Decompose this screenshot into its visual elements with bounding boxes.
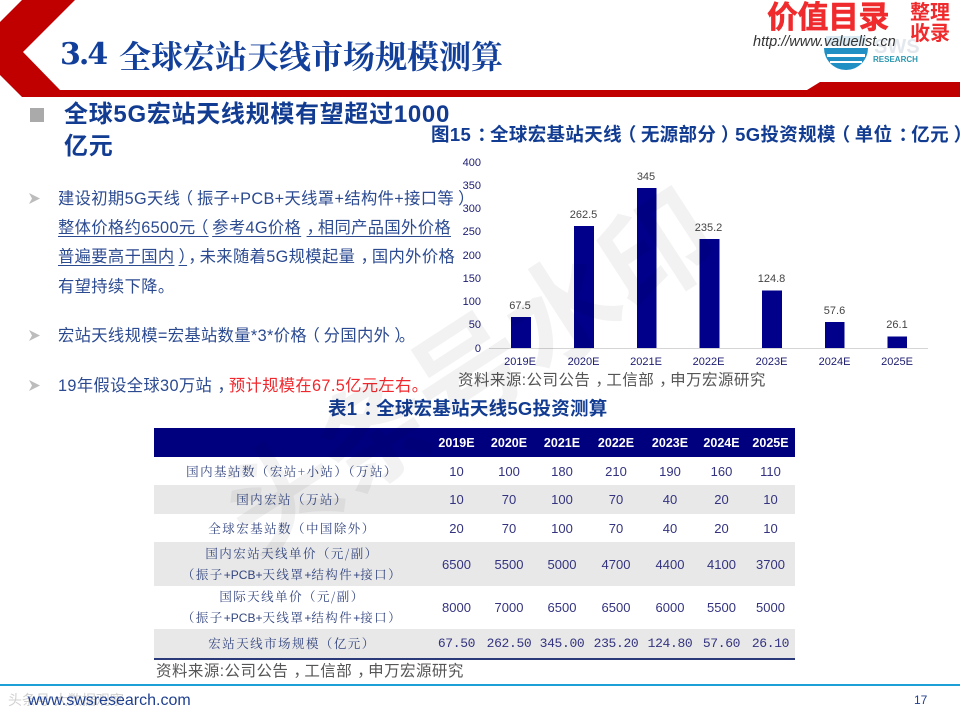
data table: 2022E	[598, 436, 634, 450]
bar chart: 50	[469, 319, 481, 331]
data table: 100	[551, 520, 573, 536]
bar chart: 300	[463, 203, 481, 215]
bar chart: 0	[475, 343, 481, 355]
data table: 国际天线单价（元/副）	[219, 587, 365, 605]
data table: 10	[763, 520, 778, 536]
data table: 6500	[442, 556, 471, 572]
footer URL: www.swsresearch.com	[28, 692, 191, 709]
data table: 4100	[707, 556, 736, 572]
title number: 3.4	[60, 37, 106, 72]
data table: 262.50	[487, 636, 531, 651]
data table: 210	[605, 464, 627, 478]
bar chart: 350	[463, 180, 481, 192]
data table: 8000	[442, 600, 471, 615]
bar chart: 250	[463, 226, 481, 238]
bar chart: 345	[637, 171, 655, 183]
data table: 3700	[756, 556, 785, 572]
bar chart: 26.1	[886, 319, 908, 331]
bar chart: 100	[463, 296, 481, 308]
data table: 70	[609, 492, 623, 507]
data table: 124.80	[648, 636, 692, 651]
data table: 2024E	[703, 436, 740, 450]
data table: 10	[449, 464, 464, 478]
data table: 2020E	[491, 436, 527, 450]
bar chart: 67.5	[509, 300, 531, 312]
table title: 表1 ：全球宏基站天线5G投资测算	[328, 398, 608, 419]
data table: 67.50	[438, 636, 475, 651]
bar chart: 400	[463, 157, 481, 169]
bar chart: 2024E	[819, 356, 850, 368]
data table: 10	[449, 492, 464, 507]
data table: 6500	[602, 600, 630, 615]
data table: 国内宏站天线单价（元/副）	[205, 544, 379, 562]
section heading: 亿元	[64, 133, 113, 160]
data table: 190	[659, 464, 681, 478]
bullet text 1 line 3: 普遍要高于国内），未来随着5G规模起量 ，国内外价格	[58, 248, 455, 266]
bar chart: 2023E	[756, 356, 787, 368]
SWS research text: RESEARCH	[873, 55, 918, 64]
data table: 5500	[707, 600, 736, 615]
bullet list	[29, 190, 475, 395]
URL: http://www.valuelist.cn	[753, 34, 896, 50]
header banner: red chevron and rule	[0, 0, 960, 97]
chart title: 图15 ：全球宏基站天线（无源部分）5G投资规模（单位 ：亿元）	[431, 124, 960, 145]
bullet icon 3	[29, 380, 40, 391]
data table: 7000	[495, 600, 523, 615]
bar chart: 2019E	[504, 356, 536, 368]
bullet text 1 line 4: 有望持续下降。	[58, 278, 174, 296]
data table: 2023E	[652, 436, 688, 450]
data table: 180	[551, 464, 573, 478]
footer rule	[0, 684, 960, 686]
data table: 70	[502, 520, 516, 536]
bar chart: 200	[463, 250, 481, 262]
data table: 6000	[656, 600, 684, 615]
bar chart: 2021E	[630, 356, 662, 368]
table source: 资料来源:公司公告 ，工信部 ，申万宏源研究	[156, 663, 464, 680]
section heading	[64, 101, 450, 160]
title	[60, 32, 503, 78]
bar chart: 2025E	[881, 356, 913, 368]
data table: 26.10	[752, 636, 789, 651]
bullet icon 2	[29, 330, 40, 341]
data table: 5000	[756, 600, 785, 615]
data table: 345.00	[540, 636, 584, 651]
data table: （振子+PCB+天线罩+结构件+接口）	[182, 564, 402, 582]
data table: 20	[449, 520, 464, 536]
bar chart	[462, 157, 928, 368]
bar chart: 150	[463, 273, 481, 285]
data table: 5000	[548, 556, 576, 572]
data table: 国内宏站（万站）	[236, 490, 348, 508]
data table: 235.20	[594, 636, 638, 651]
data table: 160	[711, 464, 732, 478]
bar chart: 235.2	[695, 222, 722, 234]
data table: 40	[663, 492, 677, 507]
logo: SWS research and value list stamp	[753, 0, 950, 70]
data table: 20	[714, 520, 729, 536]
data table: 宏站天线市场规模（亿元）	[208, 634, 376, 652]
data table: 5500	[495, 556, 523, 572]
data table: 10	[763, 492, 778, 507]
data table: 100	[551, 492, 573, 507]
bullet text 1: 建设初期5G天线（振子+PCB+天线罩+结构件+接口等）	[58, 190, 475, 208]
diagonal watermark: 头条号水印	[186, 146, 744, 586]
data table: 70	[609, 520, 623, 536]
data table: 40	[663, 520, 677, 536]
data table: 全球宏基站数（中国除外）	[208, 518, 376, 536]
bar chart: 2022E	[693, 356, 724, 368]
data table: 4700	[602, 556, 630, 572]
data table: 70	[502, 492, 516, 507]
data table	[154, 428, 795, 660]
bar chart: 124.8	[758, 273, 785, 285]
footer watermark: 头条号 大数据观察	[8, 692, 124, 708]
value list red wordmark: 价值目录	[767, 0, 889, 35]
data table: 110	[760, 464, 781, 478]
data table: 2025E	[752, 436, 789, 450]
data table: 6500	[548, 600, 576, 615]
SWS faint wordmark: SWS	[874, 36, 920, 58]
stamp: 整理收录: 整理收录	[910, 2, 950, 45]
chart source: 资料来源:公司公告 ，工信部 ，申万宏源研究	[458, 372, 766, 389]
bullet text 2: 宏站天线规模=宏基站数量*3*价格（分国内外）。	[58, 327, 415, 345]
data table: 国内基站数（宏站+小站）（万站）	[186, 462, 398, 480]
bullet icon 1	[29, 193, 40, 204]
data table: 2019E	[438, 436, 475, 450]
bullet text 1 line 2: 整体价格约6500元（参考4G价格 ，相同产品国外价格	[58, 219, 451, 237]
page number: 17	[914, 693, 927, 707]
title text: 全球宏站天线市场规模测算	[119, 32, 503, 78]
data table: 4400	[656, 556, 684, 572]
data table: 100	[498, 464, 520, 478]
data table: 20	[714, 492, 729, 507]
data table: 2021E	[544, 436, 580, 450]
section heading: 全球5G宏站天线规模有望超过1000	[64, 101, 450, 128]
bullet text 3: 19年假设全球30万站 ，预计规模在67.5亿元左右。	[58, 377, 428, 395]
bar chart: 262.5	[570, 209, 597, 221]
heading bullet: square	[30, 108, 44, 122]
data table: 57.60	[703, 636, 740, 651]
bar chart: 57.6	[824, 305, 845, 317]
bar chart: 2020E	[568, 356, 599, 368]
icon: SWS globe	[824, 36, 868, 70]
data table: （振子+PCB+天线罩+结构件+接口）	[182, 608, 402, 626]
